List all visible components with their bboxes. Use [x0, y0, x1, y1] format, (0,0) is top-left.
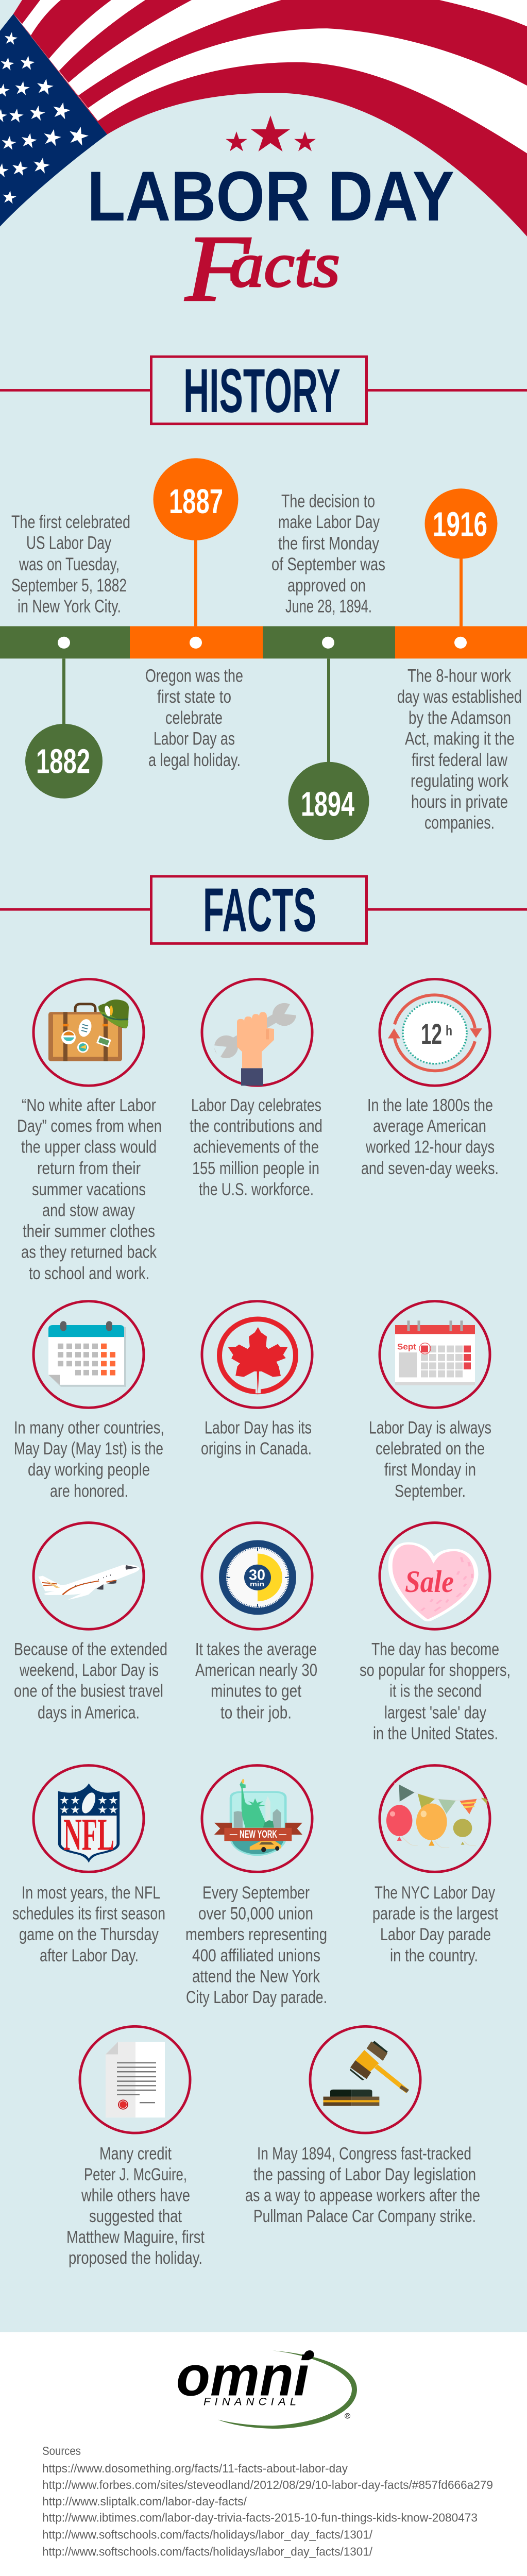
- text: fact: the upper class would: [21, 1138, 157, 1157]
- text: fact: [245, 2144, 480, 2226]
- icon: sale heart: Sale: [405, 1565, 454, 1599]
- icon: document with seal: [106, 2042, 165, 2117]
- text: fact: 155 million people in: [192, 1159, 319, 1178]
- icon: maple leaf roundel: [219, 1319, 296, 1396]
- text: fact: celebrated on the: [376, 1439, 485, 1459]
- text: fact: it is the second: [389, 1682, 482, 1701]
- icon: New York badge: [214, 1778, 302, 1856]
- text: fact: “No white after Labor: [22, 1096, 156, 1115]
- icon: gavel: [324, 2041, 409, 2106]
- text: 1894 milestone: [271, 492, 385, 616]
- title: Facts script: F: [185, 216, 251, 321]
- text: fact: the contributions and: [190, 1117, 322, 1136]
- text: fact: In many other countries,: [14, 1418, 164, 1437]
- icon: September calendar: [395, 1320, 475, 1385]
- text: sources: https://www.dosomething.org/facts/11-facts-about-labor-day: [42, 2462, 348, 2475]
- text: 1894 milestone: The decision to: [281, 492, 375, 511]
- text: fact: are honored.: [50, 1482, 128, 1501]
- text: fact: return from their: [37, 1159, 141, 1178]
- text: fact: game on the Thursday: [19, 1925, 159, 1944]
- panel: NYC parade: [372, 1766, 498, 1965]
- text: fact: one of the busiest travel: [14, 1682, 163, 1701]
- text: 1882 milestone: was on Tuesday,: [19, 555, 120, 574]
- text: fact: Day” comes from when: [17, 1117, 162, 1136]
- text: fact: In the late 1800s the: [367, 1096, 493, 1115]
- text: fact: to their job.: [220, 1703, 292, 1722]
- text: 1887 milestone: Labor Day as: [154, 729, 235, 749]
- text: fact: after Labor Day.: [40, 1946, 139, 1965]
- heading: History: HISTORY: [183, 357, 341, 426]
- text: fact: and stow away: [42, 1201, 135, 1220]
- text: fact: proposed the holiday.: [69, 2249, 202, 2268]
- logo: Omni Financial: [176, 2344, 357, 2429]
- text: 1882 milestone: in New York City.: [18, 597, 121, 616]
- text: 1887 milestone: [145, 666, 243, 770]
- icon: 30 minute timer: 30: [249, 1567, 265, 1584]
- text: fact: weekend, Labor Day is: [19, 1661, 159, 1680]
- milestone: 1887: 1887: [169, 483, 223, 521]
- icon: sale heart: [390, 1544, 476, 1620]
- logo: Omni Financial: FINANCIAL: [203, 2395, 296, 2408]
- milestone: 1882: 1882: [36, 743, 90, 781]
- text: fact: In most years, the NFL: [22, 1884, 160, 1903]
- text: sources: [42, 2445, 493, 2558]
- text: fact: schedules its first season: [12, 1904, 165, 1923]
- icon: suitcase with hat: [48, 999, 129, 1061]
- icon: calendar with orange days: [48, 1321, 126, 1387]
- panel: first Monday in September: [369, 1301, 491, 1501]
- icon: New York badge: NEW YORK: [240, 1827, 277, 1840]
- text: fact: members representing: [185, 1925, 327, 1944]
- text: fact: origins in Canada.: [201, 1439, 312, 1459]
- text: fact: suggested that: [89, 2207, 182, 2226]
- text: 1916 milestone: [397, 666, 522, 833]
- text: fact: May Day (May 1st) is the: [14, 1439, 163, 1459]
- footer panel: [0, 2332, 527, 2576]
- panel: union parade: [185, 1766, 327, 2007]
- icon: balloons and bunting: [386, 1783, 488, 1848]
- icon: airplane: [38, 1565, 140, 1600]
- icon: three stars: [226, 115, 316, 151]
- panel: sale day: [360, 1523, 511, 1743]
- text: fact: days in America.: [38, 1703, 140, 1722]
- icon: hand holding wrench: [213, 1002, 298, 1086]
- text: sources: http://www.softschools.com/facts/holidays/labor_day_facts/1301/: [42, 2545, 372, 2558]
- text: fact: summer vacations: [32, 1180, 146, 1199]
- heading: History: [0, 357, 527, 426]
- text: fact: Labor Day parade: [380, 1925, 491, 1944]
- text: fact: achievements of the: [193, 1138, 319, 1157]
- text: 1894 milestone: make Labor Day: [278, 513, 380, 532]
- panel: busiest travel: [14, 1523, 167, 1722]
- icon: September calendar: Sept: [397, 1342, 416, 1351]
- text: fact: to school and work.: [29, 1264, 149, 1283]
- text: fact: Labor Day has its: [205, 1418, 312, 1437]
- panel: McGuire: [66, 2026, 205, 2268]
- text: 1894 milestone: the first Monday: [278, 534, 379, 554]
- text: fact: [360, 1640, 511, 1743]
- milestone: 1882: [25, 658, 103, 799]
- text: 1887 milestone: Oregon was the: [145, 666, 243, 686]
- icon: 30 minute timer: min: [250, 1580, 264, 1588]
- text: fact: day working people: [28, 1460, 150, 1480]
- text: fact: their summer clothes: [23, 1222, 155, 1241]
- icon: 12 hour clock: 12: [421, 1018, 442, 1050]
- panel: 12-hour days: [361, 979, 499, 1178]
- text: fact: [14, 1418, 164, 1501]
- title: Facts script: acts: [230, 230, 340, 300]
- text: 1882 milestone: US Labor Day: [26, 533, 111, 553]
- text: fact: in the country.: [390, 1946, 478, 1965]
- panel: contributions: [190, 979, 322, 1199]
- text: sources: http://www.ibtimes.com/labor-day-trivia-facts-2015-10-fun-things-kids-know-2080473: [42, 2511, 478, 2524]
- text: fact: [185, 1884, 327, 2007]
- panel: Congress: [245, 2026, 480, 2226]
- text: 1887 milestone: celebrate: [165, 708, 223, 728]
- text: fact: Every September: [202, 1884, 310, 1903]
- text: fact: [12, 1884, 165, 1965]
- milestone: 1916: 1916: [433, 506, 487, 544]
- text: 1894 milestone: approved on: [287, 575, 366, 596]
- text: fact: minutes to get: [211, 1682, 301, 1701]
- text: 1887 milestone: first state to: [157, 687, 231, 707]
- flag banner: [0, 0, 527, 236]
- panel: commute: [195, 1523, 317, 1722]
- icon: NFL shield: NFL: [63, 1809, 114, 1860]
- text: 1882 milestone: The first celebrated: [11, 513, 130, 532]
- milestone: 1894: 1894: [301, 786, 354, 823]
- text: fact: Many credit: [99, 2144, 172, 2163]
- text: 1894 milestone: June 28, 1894.: [285, 597, 372, 616]
- heading: Facts: FACTS: [203, 876, 316, 944]
- text: fact: first Monday in: [384, 1460, 476, 1480]
- text: fact: [361, 1096, 499, 1178]
- text: fact: Because of the extended: [14, 1640, 167, 1659]
- panel: May Day: [14, 1301, 164, 1501]
- text: fact: as they returned back: [21, 1243, 157, 1262]
- heading: Facts: [0, 876, 527, 944]
- title: Facts script: [185, 216, 340, 321]
- panel: no white after Labor Day: [17, 979, 162, 1283]
- text: fact: while others have: [81, 2186, 190, 2205]
- text: fact: attend the New York: [192, 1967, 320, 1986]
- text: fact: American nearly 30: [195, 1661, 317, 1680]
- icon: NFL shield: [58, 1784, 120, 1863]
- text: fact: [372, 1884, 498, 1965]
- text: fact: Labor Day celebrates: [191, 1096, 321, 1115]
- text: fact: Labor Day is always: [369, 1418, 491, 1437]
- text: fact: [195, 1640, 317, 1722]
- text: sources: http://www.softschools.com/facts/holidays/labor_day_facts/1301/: [42, 2528, 372, 2541]
- text: fact: [17, 1096, 162, 1283]
- timeline bar: [0, 626, 527, 658]
- icon: 30 minute timer: [219, 1540, 296, 1615]
- text: fact: September.: [395, 1482, 466, 1501]
- text: sources: http://www.sliptalk.com/labor-day-facts/: [42, 2495, 247, 2508]
- text: fact: City Labor Day parade.: [186, 1988, 327, 2007]
- text: fact: [14, 1640, 167, 1722]
- text: fact: Peter J. McGuire,: [84, 2165, 187, 2184]
- icon: 12 hour clock: [388, 995, 482, 1071]
- text: fact: [190, 1096, 322, 1199]
- text: fact: 400 affiliated unions: [192, 1946, 320, 1965]
- milestone: 1916: [424, 488, 498, 626]
- milestone: 1887: [154, 458, 238, 626]
- milestone: 1894: [288, 658, 369, 840]
- text: 1887 milestone: a legal holiday.: [148, 750, 241, 770]
- text: 1882 milestone: September 5, 1882: [11, 575, 127, 596]
- text: fact: [369, 1418, 491, 1501]
- text: 1894 milestone: of September was: [271, 555, 385, 574]
- panel: origins in Canada: [201, 1301, 312, 1459]
- text: 1882 milestone: [11, 513, 130, 616]
- text: fact: It takes the average: [195, 1640, 317, 1659]
- title: Labor Day: LABOR DAY: [87, 157, 454, 235]
- text: fact: the U.S. workforce.: [199, 1180, 314, 1199]
- logo: Omni Financial: omni: [176, 2344, 310, 2408]
- text: fact: [66, 2144, 205, 2268]
- text: sources: http://www.forbes.com/sites/steveodland/2012/08/29/10-labor-day-facts/#857fd666a279: [42, 2478, 493, 2492]
- text: fact: over 50,000 union: [198, 1904, 313, 1923]
- text: fact: average American: [373, 1117, 486, 1136]
- text: fact: [201, 1418, 312, 1459]
- logo: Omni Financial: ®: [345, 2413, 350, 2421]
- text: fact: Matthew Maguire, first: [66, 2228, 205, 2247]
- text: 1916 milestone: companies.: [424, 813, 495, 833]
- icon: 12 hour clock: h: [446, 1023, 452, 1039]
- text: sources: Sources: [42, 2445, 81, 2458]
- panel: NFL: [12, 1766, 165, 1965]
- text: fact: largest 'sale' day: [384, 1703, 487, 1722]
